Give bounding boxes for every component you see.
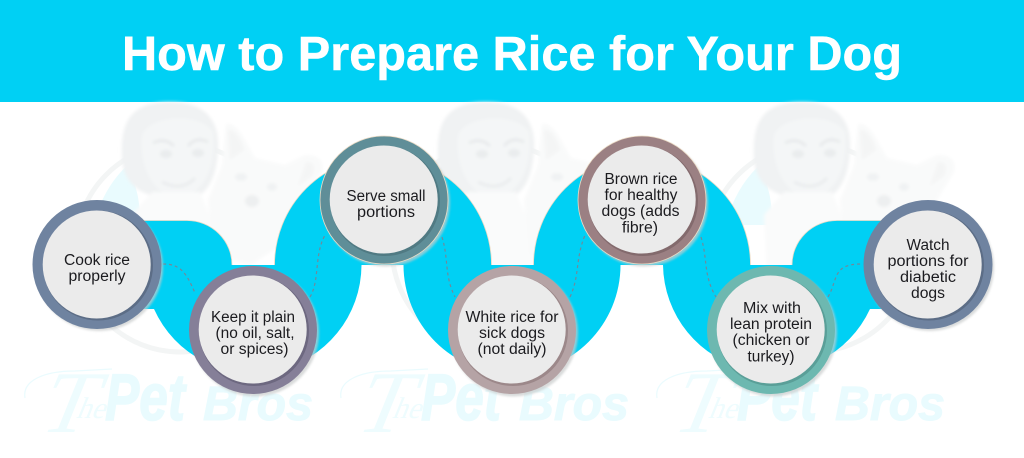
step 4: White rice for sick dogs: White rice for (466, 309, 558, 326)
dashed connectors (163, 235, 861, 297)
step 3: Serve small portions: Serve small (346, 188, 426, 205)
step 2: Keep it plain: or spices) (220, 341, 288, 358)
watermark: brand logo centre (341, 102, 639, 451)
step 6: Mix with lean protein: lean protein (730, 316, 812, 333)
step 6: Mix with lean protein: Mix with (743, 300, 801, 317)
step 6: Mix with lean protein: (chicken or (732, 332, 810, 349)
step 5: Brown rice for healthy dogs (578, 136, 708, 266)
step 2: Keep it plain: (no oil, salt, (216, 325, 294, 342)
step 2: Keep it plain: Keep it plain (211, 309, 295, 326)
step 5: Brown rice for healthy dogs: fibre) (622, 220, 658, 236)
step 6: Mix with lean protein (707, 266, 837, 396)
step 3: Serve small portions: portions (357, 204, 415, 221)
band top edge highlight (97, 157, 928, 265)
title: How to Prepare Rice for Your Dog (122, 28, 902, 81)
step 7: Watch portions for diabetic dogs (864, 200, 994, 331)
step 4: White rice for sick dogs (448, 266, 578, 396)
watermark: brand logo left (25, 102, 323, 451)
step 7: Watch portions for diabetic dogs: Watch (906, 237, 950, 254)
step 2: Keep it plain (189, 266, 319, 396)
step 1: Cook rice properly: Cook rice (64, 252, 130, 269)
step 3: Serve small portions (320, 136, 450, 266)
step 7: Watch portions for diabetic dogs: portions for (888, 253, 968, 270)
step 5: Brown rice for healthy dogs: for healthy (604, 187, 678, 204)
step 4: White rice for sick dogs: (not daily) (478, 341, 546, 358)
step 6: Mix with lean protein: turkey) (748, 348, 794, 366)
wavy cyan band (97, 157, 928, 374)
step 1: Cook rice properly: properly (68, 268, 126, 285)
step 5: Brown rice for healthy dogs: Brown rice (604, 171, 678, 188)
header banner (0, 0, 1024, 102)
step 4: White rice for sick dogs: sick dogs (479, 325, 545, 342)
step 1: Cook rice properly (32, 200, 163, 331)
watermark: brand logo right (657, 102, 955, 451)
step 7: Watch portions for diabetic dogs: dogs (911, 285, 945, 302)
step 7: Watch portions for diabetic dogs: diabetic (900, 269, 956, 286)
step 5: Brown rice for healthy dogs: dogs (adds (602, 203, 680, 220)
